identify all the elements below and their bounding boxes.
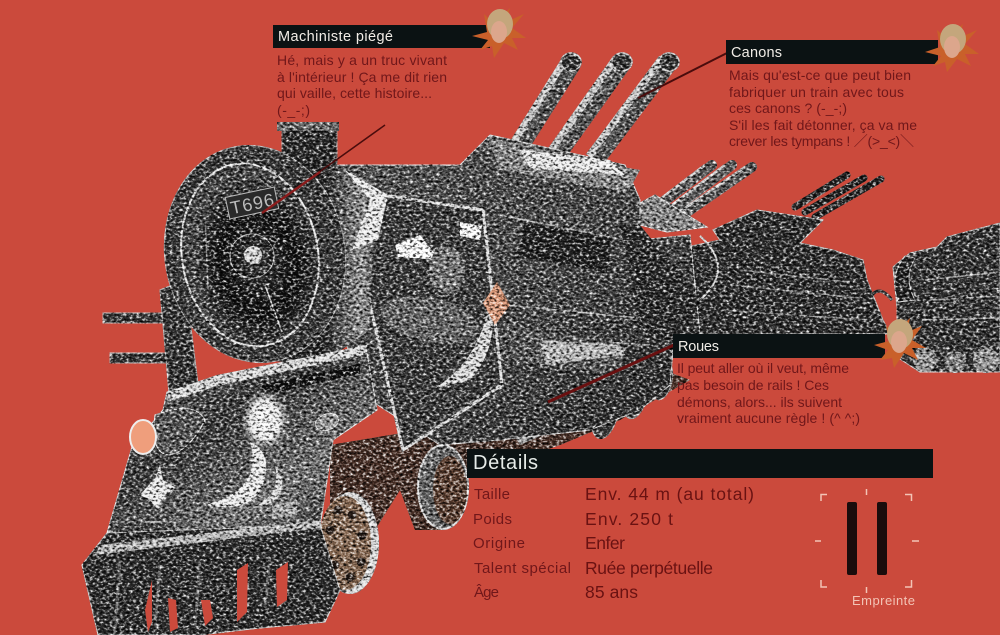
row: poids: Poids [473, 511, 512, 528]
rear carriage [893, 223, 1000, 373]
row: taille [474, 484, 754, 504]
callout: roues [673, 318, 926, 426]
heading bar [726, 40, 938, 64]
leader line: canons [638, 53, 727, 98]
row: talent spécial [474, 558, 713, 578]
row: âge [474, 582, 638, 602]
body text: fabriquer un train avec tous [729, 84, 904, 100]
body text [677, 360, 860, 426]
body text: Hé, mais y a un truc vivant [277, 52, 447, 68]
heading bar [273, 25, 490, 48]
body text: Mais qu'est-ce que peut bien [729, 67, 911, 83]
portrait [472, 8, 526, 58]
row: origine: Origine [473, 535, 525, 552]
number plate: T696 [229, 190, 276, 218]
details heading: Détails [473, 452, 538, 474]
heading bar: Canons [731, 45, 782, 61]
row: poids: Env. 250 t [585, 509, 673, 529]
body text [729, 67, 917, 149]
row: talent spécial: Talent spécial [474, 560, 571, 577]
callout: canons [726, 24, 979, 149]
body text: démons, alors... ils suivent [677, 394, 842, 410]
front wheels [319, 445, 468, 594]
row: origine [473, 533, 625, 553]
body text: à l'intérieur ! Ça me dit rien [277, 69, 447, 85]
headlight [130, 420, 156, 454]
undercarriage [330, 358, 690, 530]
body text: vraiment aucune règle ! (^ ^;) [677, 410, 860, 426]
cowcatcher red slots [145, 562, 288, 632]
main cannons [505, 53, 679, 160]
row: poids [473, 509, 673, 529]
middle carriage with cannons [673, 175, 892, 334]
rear rods [103, 280, 200, 405]
middle turret [640, 165, 752, 232]
body text: crever les tympans ! ／(>_<)＼ [729, 133, 914, 149]
boiler and smokebox [147, 122, 388, 377]
portrait [925, 24, 979, 72]
row: taille: Env. 44 m (au total) [585, 484, 754, 504]
heading bar [673, 334, 885, 358]
leader line: roues [548, 345, 674, 402]
footprint frame marks [815, 489, 919, 593]
heading bar: Roues [678, 339, 719, 355]
leader line: machiniste [262, 125, 385, 213]
callout: machiniste [273, 8, 526, 118]
panel: details [467, 449, 933, 602]
side panel [360, 193, 510, 450]
row: âge: 85 ans [585, 582, 638, 602]
body text: ces canons ? (-_-;) [729, 100, 847, 116]
row: âge: Âge [474, 584, 499, 601]
body text: Il peut aller où il veut, même [677, 360, 849, 376]
footprint caption: Empreinte [852, 593, 915, 608]
footprint diagram [815, 489, 919, 608]
body text: S'il les fait détonner, ça va me [729, 117, 917, 133]
body text: qui vaille, cette histoire... [277, 85, 432, 101]
main hull [340, 135, 700, 445]
row: talent spécial: Ruée perpétuelle [585, 558, 713, 578]
body text: pas besoin de rails ! Ces [677, 377, 829, 393]
body text: (-_-;) [277, 102, 310, 118]
footprint tracks [847, 502, 887, 575]
row: taille: Taille [474, 486, 510, 503]
cowcatcher [82, 520, 340, 635]
body text [277, 52, 447, 118]
row: origine: Enfer [585, 533, 625, 553]
cowling [107, 345, 377, 536]
details heading [467, 449, 933, 478]
portrait [874, 318, 926, 368]
heading bar: Machiniste piégé [278, 29, 393, 45]
